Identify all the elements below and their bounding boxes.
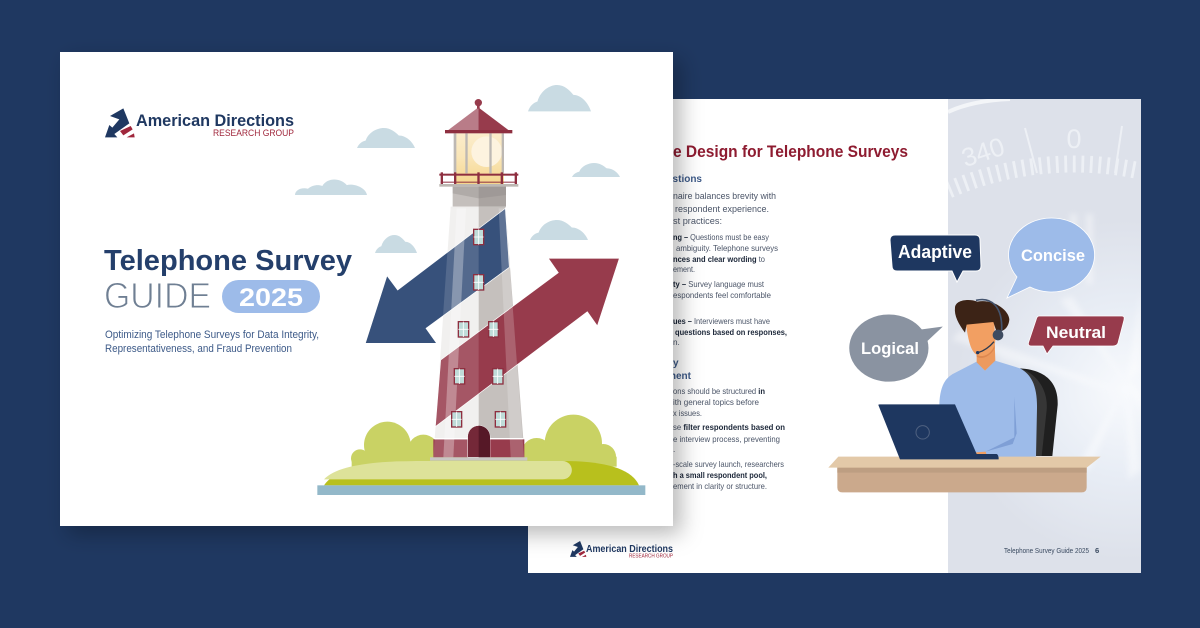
logo: footer: RESEARCH GROUP [629, 554, 674, 560]
icon: tower [433, 207, 524, 457]
subtitle [105, 329, 319, 355]
callout: Logical: Logical [861, 339, 919, 358]
icon: agent figure [939, 300, 1037, 459]
callout: Adaptive [890, 235, 981, 282]
text block: question sequencing: e interview process, preventing [673, 435, 780, 444]
panel: gauge photo background: 0 [1066, 124, 1082, 154]
text block: crafting questions: espondents feel comfortable [673, 291, 771, 300]
panel: gauge photo background: 340 [958, 131, 1008, 173]
callout: Concise: Concise [1021, 246, 1085, 265]
text block: crafting questions: ng – Questions must be easy [673, 233, 770, 242]
callout: Logical [849, 314, 944, 382]
title: Telephone Survey: Telephone Survey [104, 245, 352, 277]
text block: crafting questions: ement. [673, 265, 695, 274]
heading: questionnaire design: e Design for Telephone Surveys [673, 143, 908, 161]
icon: gallery railing [439, 172, 518, 207]
arrow: red, up-right [435, 258, 619, 427]
text block: crafting questions: questions based on responses, [675, 328, 787, 337]
badge: 2025 [222, 280, 320, 313]
callout: Adaptive: Adaptive [898, 242, 972, 262]
text block: question sequencing: x issues. [673, 409, 702, 418]
illustration: lighthouse with arrows [317, 99, 645, 495]
text block: crafting questions: ty – Survey language must [673, 280, 765, 289]
text block: crafting questions: respondent experience. [675, 204, 769, 215]
icon: plinth [430, 457, 527, 461]
text block: crafting questions: nces and clear wording to [673, 255, 765, 264]
text block: question sequencing: y [673, 358, 679, 369]
panel: inside page spread [528, 99, 1141, 573]
text block: question sequencing: . [673, 445, 675, 454]
callout: Concise [1007, 218, 1095, 298]
arrow: blue, down-left [365, 208, 509, 343]
icon: windows [452, 229, 506, 427]
icon: bushes [351, 415, 617, 472]
logo: footer: American Directions [586, 543, 673, 555]
text block: question sequencing: ement in clarity or structure. [673, 482, 767, 491]
callout: Neutral [1028, 316, 1124, 354]
icon: lantern room [445, 99, 512, 185]
panel: guide cover [60, 52, 673, 526]
logo: footer [570, 541, 674, 560]
logo: American Directions [105, 108, 294, 138]
text block: question sequencing: h a small respondent pool, [673, 471, 767, 480]
text block: question sequencing [667, 358, 785, 491]
text block: crafting questions [673, 174, 787, 347]
text block: crafting questions: stions [673, 174, 702, 185]
callout: Neutral: Neutral [1046, 323, 1106, 342]
text block: question sequencing: -scale survey launch, researchers [673, 460, 784, 469]
subtitle: Optimizing Telephone Surveys for Data Integrity, [105, 329, 319, 341]
text block: question sequencing: ment [667, 371, 692, 382]
title: GUIDE: GUIDE [104, 275, 211, 316]
illustration: agent at desk [828, 300, 1101, 492]
badge: 2025: 2025 [239, 284, 303, 312]
text block: question sequencing: ons should be structured in [673, 387, 765, 396]
logo: American Directions: American Directions [136, 112, 294, 130]
text block: crafting questions: naire balances brevity with [673, 191, 776, 202]
text block: crafting questions: n. [673, 338, 680, 347]
clouds [295, 85, 620, 253]
icon: chair [1020, 368, 1058, 456]
text block: crafting questions: ues – Interviewers must have [673, 317, 770, 326]
icon: island [317, 461, 645, 495]
text block: question sequencing: se filter respondents based on [673, 423, 785, 432]
icon: desk [828, 457, 1101, 492]
text block: question sequencing: ith general topics before [673, 398, 759, 407]
icon: laptop [878, 404, 999, 459]
text block: crafting questions: st practices: [673, 216, 722, 227]
footer: page label: 6 [1095, 546, 1099, 555]
subtitle: Representativeness, and Fraud Prevention [105, 343, 292, 355]
logo: American Directions: RESEARCH GROUP [213, 128, 294, 138]
lighthouse light bands [433, 208, 524, 457]
footer: page label: Telephone Survey Guide 2025 [1004, 546, 1089, 555]
icon: door [468, 426, 490, 457]
text block: crafting questions: ambiguity. Telephone surveys [676, 244, 778, 253]
panel: gauge photo background [945, 99, 1141, 573]
